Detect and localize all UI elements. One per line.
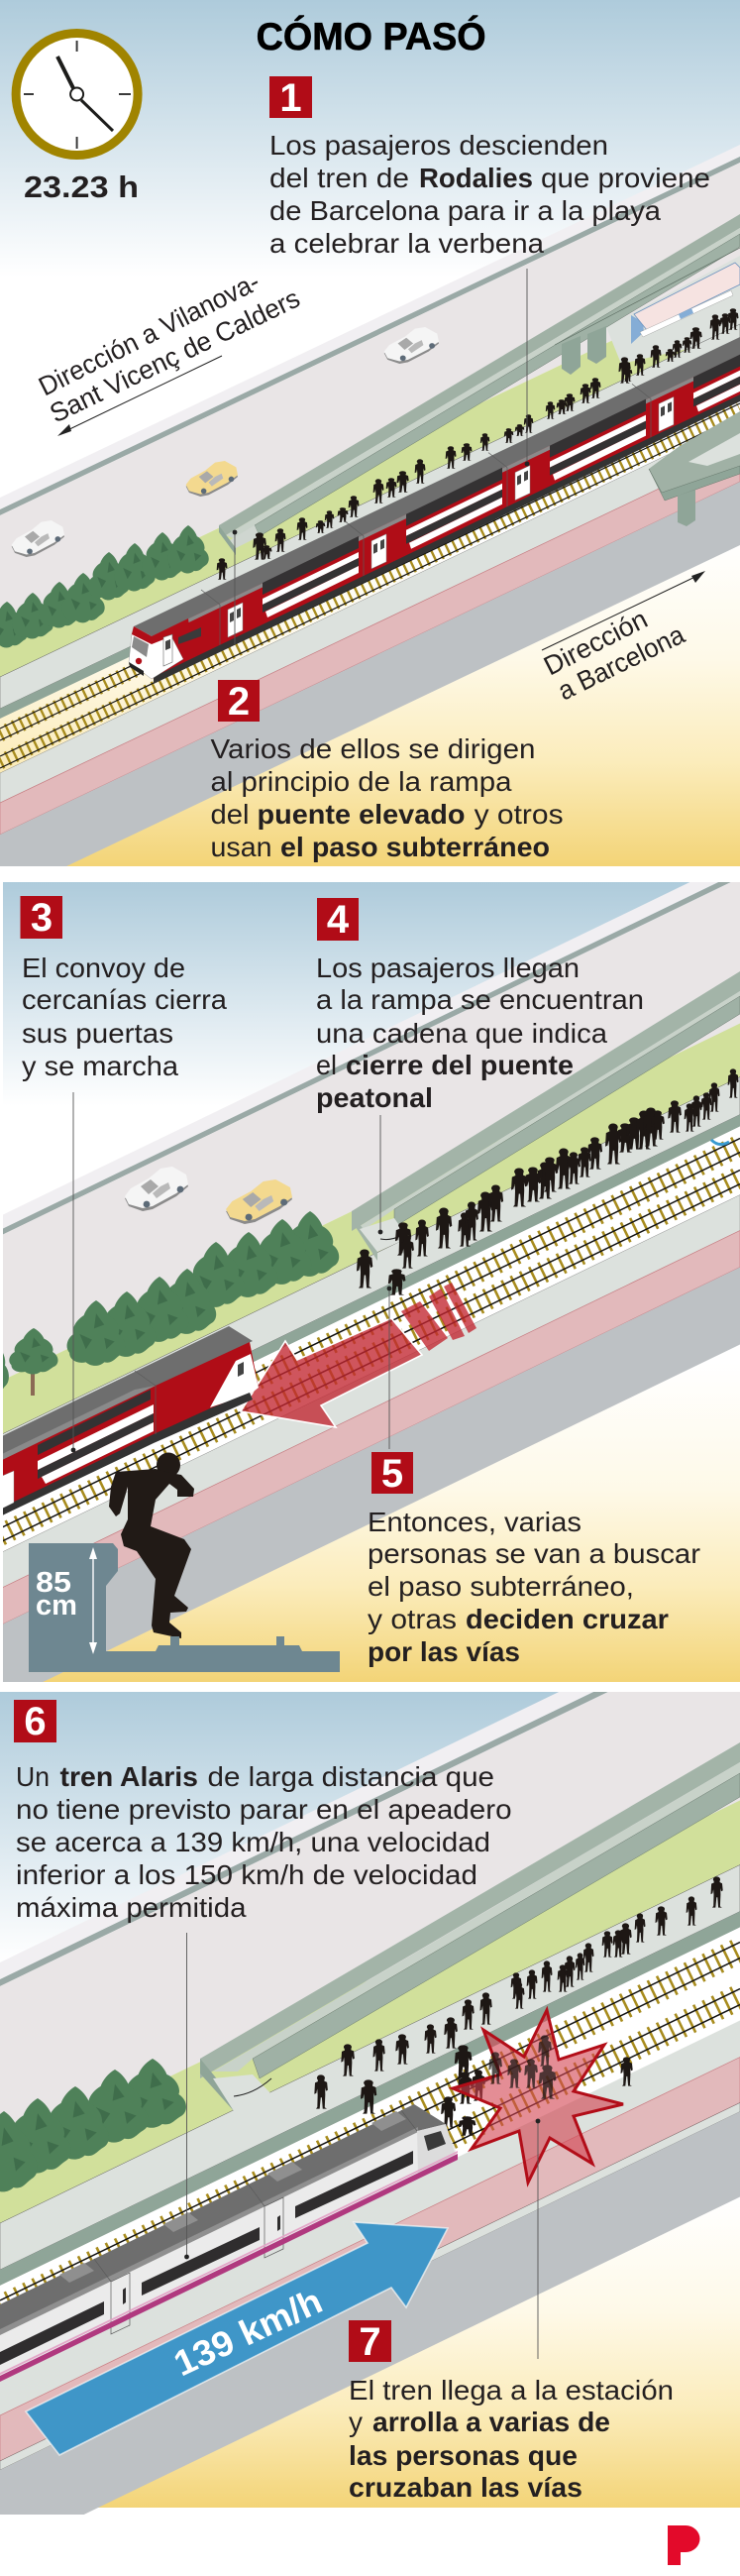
step 1 text: a celebrar la verbena <box>269 228 545 259</box>
cars on road <box>12 327 439 557</box>
railway tracks <box>0 376 740 768</box>
panel: steps 3, 4 and 5 scene <box>0 858 740 1703</box>
step 1 text: Rodalies <box>419 163 533 193</box>
step 4 text: Los pasajeros llegan <box>316 952 580 983</box>
time label: 23.23 h <box>24 169 139 204</box>
step 6 badge: 6 <box>24 1700 47 1743</box>
step 2 text: usan <box>210 832 271 862</box>
red arrow on tracks <box>241 1283 476 1427</box>
departing Rodalies train <box>0 1326 259 1516</box>
step 6 text: no tiene previsto parar en el apeadero <box>16 1794 512 1825</box>
railway tracks <box>0 1138 740 1542</box>
road <box>0 1692 740 2123</box>
step 6 text: inferior a los 150 km/h de velocidad <box>16 1859 477 1890</box>
step 7 text: y <box>349 2407 363 2437</box>
step 2 text <box>210 733 564 862</box>
step 5 text: deciden cruzar <box>466 1604 669 1634</box>
step 4 text: a la rampa se encuentran <box>316 984 644 1015</box>
cars on road <box>125 1167 292 1224</box>
direction label: Barcelona: Dirección <box>539 604 652 681</box>
Rodalies train <box>129 330 740 684</box>
passengers on platform <box>217 308 739 580</box>
step 4 badge: 4 <box>327 898 350 942</box>
step 7 text <box>349 2375 674 2503</box>
direction label: Barcelona <box>539 571 705 706</box>
explosion impact star <box>453 2010 623 2183</box>
step 6 text <box>16 1761 512 1923</box>
step 2 text: Varios de ellos se dirigen <box>210 733 535 764</box>
leader lines <box>233 269 529 644</box>
platform profile: 85 cm: 85 <box>36 1567 71 1599</box>
step 1 text: del tren de <box>269 163 409 193</box>
step 5 text: personas se van a buscar <box>368 1538 700 1569</box>
step 7 text: las personas que <box>349 2440 578 2471</box>
pedestrian ramp <box>352 971 740 1261</box>
step 7 badge <box>349 2320 391 2364</box>
road <box>0 163 740 632</box>
step 7 badge: 7 <box>359 2320 381 2364</box>
step 1 text: que proviene <box>541 163 710 193</box>
step 2 badge <box>218 680 260 724</box>
step 6 text: máxima permitida <box>16 1892 247 1923</box>
trees <box>0 525 209 648</box>
trees <box>67 1211 339 1366</box>
step 2 text: al principio de la rampa <box>210 766 512 797</box>
station stair cover <box>631 263 740 344</box>
step 5 badge: 5 <box>381 1452 403 1496</box>
step 1 badge <box>269 76 312 120</box>
grey band <box>0 2111 740 2555</box>
step 5 text: Entonces, varias <box>368 1507 581 1537</box>
platform profile: 85 cm <box>29 1543 340 1672</box>
blue speed arrow: 139 km/h <box>167 2280 328 2384</box>
blue speed arrow <box>26 2222 448 2455</box>
platform profile: 85 cm: cm <box>36 1590 77 1622</box>
step 4 text <box>316 952 644 1113</box>
step 1 text: de Barcelona para ir a la playa <box>269 195 662 226</box>
step 4 text: el <box>316 1050 337 1080</box>
step 5 text <box>368 1507 700 1667</box>
grass strip <box>0 1023 740 1435</box>
publisher logo <box>668 2525 699 2565</box>
step 4 text: cierre del puente <box>346 1050 574 1080</box>
step 2 text: el paso subterráneo <box>280 832 550 862</box>
road <box>0 878 740 1382</box>
step 6 text: de larga distancia que <box>208 1761 494 1792</box>
step 3 badge: 3 <box>31 896 53 940</box>
step 3 text: El convoy de <box>22 952 185 983</box>
direction label: Barcelona: a Barcelona <box>553 619 689 706</box>
step 5 text: el paso subterráneo, <box>368 1571 634 1602</box>
step 1 text: Los pasajeros descienden <box>269 130 608 161</box>
step 3 badge <box>20 896 62 940</box>
step 7 text: El tren llega a la estación <box>349 2375 674 2406</box>
pink band <box>0 1231 740 1625</box>
pedestrian ramp and bridge <box>219 214 740 555</box>
step 3 text <box>22 952 228 1081</box>
step 6 badge <box>14 1700 56 1743</box>
runner silhouette <box>109 1453 194 1638</box>
icon: clock <box>12 29 143 160</box>
leader lines <box>184 1933 540 2359</box>
step 2 badge: 2 <box>228 680 250 724</box>
step 2 text: y otros <box>475 799 564 830</box>
direction label: Vilanova: Sant Vicenç de Calders <box>46 283 304 428</box>
Alaris train <box>0 2104 458 2382</box>
trees <box>0 2059 186 2191</box>
grass strip <box>0 341 687 677</box>
pink band <box>0 450 740 835</box>
step 4 text: peatonal <box>316 1082 433 1113</box>
solitary tree <box>0 1328 58 1396</box>
grey band <box>0 1267 740 1703</box>
step 6 text: tren Alaris <box>59 1761 198 1792</box>
step 7 text: arrolla a varias de <box>372 2407 610 2437</box>
panel: steps 6 and 7 scene <box>0 1692 740 2515</box>
step 1 badge: 1 <box>279 76 302 120</box>
lower right ramp structure <box>649 411 740 526</box>
step 7 text: cruzaban las vías <box>349 2472 582 2503</box>
leader lines <box>71 1092 391 1452</box>
direction label: Vilanova: Dirección a Vilanova- <box>34 267 264 401</box>
grey band <box>0 482 740 898</box>
passengers on platform <box>314 1876 723 2136</box>
step 3 text: sus puertas <box>22 1018 173 1049</box>
step 6 text: se acerca a 139 km/h, una velocidad <box>16 1827 490 1857</box>
panel: step 1 and 2 scene <box>0 0 740 898</box>
step 2 text: del <box>210 799 250 830</box>
step 4 badge <box>317 898 359 942</box>
railway tracks <box>0 1940 740 2304</box>
grass strip <box>0 1800 740 2223</box>
step 3 text: cercanías cierra <box>22 984 228 1015</box>
step 5 text: por las vías <box>368 1636 520 1667</box>
step 5 text: y otras <box>368 1604 457 1634</box>
step 1 text <box>269 130 710 259</box>
passengers on platform <box>357 1068 739 1295</box>
step 6 text: Un <box>16 1761 50 1792</box>
pink band <box>0 2058 740 2461</box>
step 5 badge <box>371 1452 413 1496</box>
pedestrian ramp <box>200 1742 740 2111</box>
title: CÓMO PASÓ <box>257 15 486 58</box>
step 4 text: una cadena que indica <box>316 1018 608 1049</box>
step 2 text: puente elevado <box>258 799 466 830</box>
step 3 text: y se marcha <box>22 1051 179 1081</box>
